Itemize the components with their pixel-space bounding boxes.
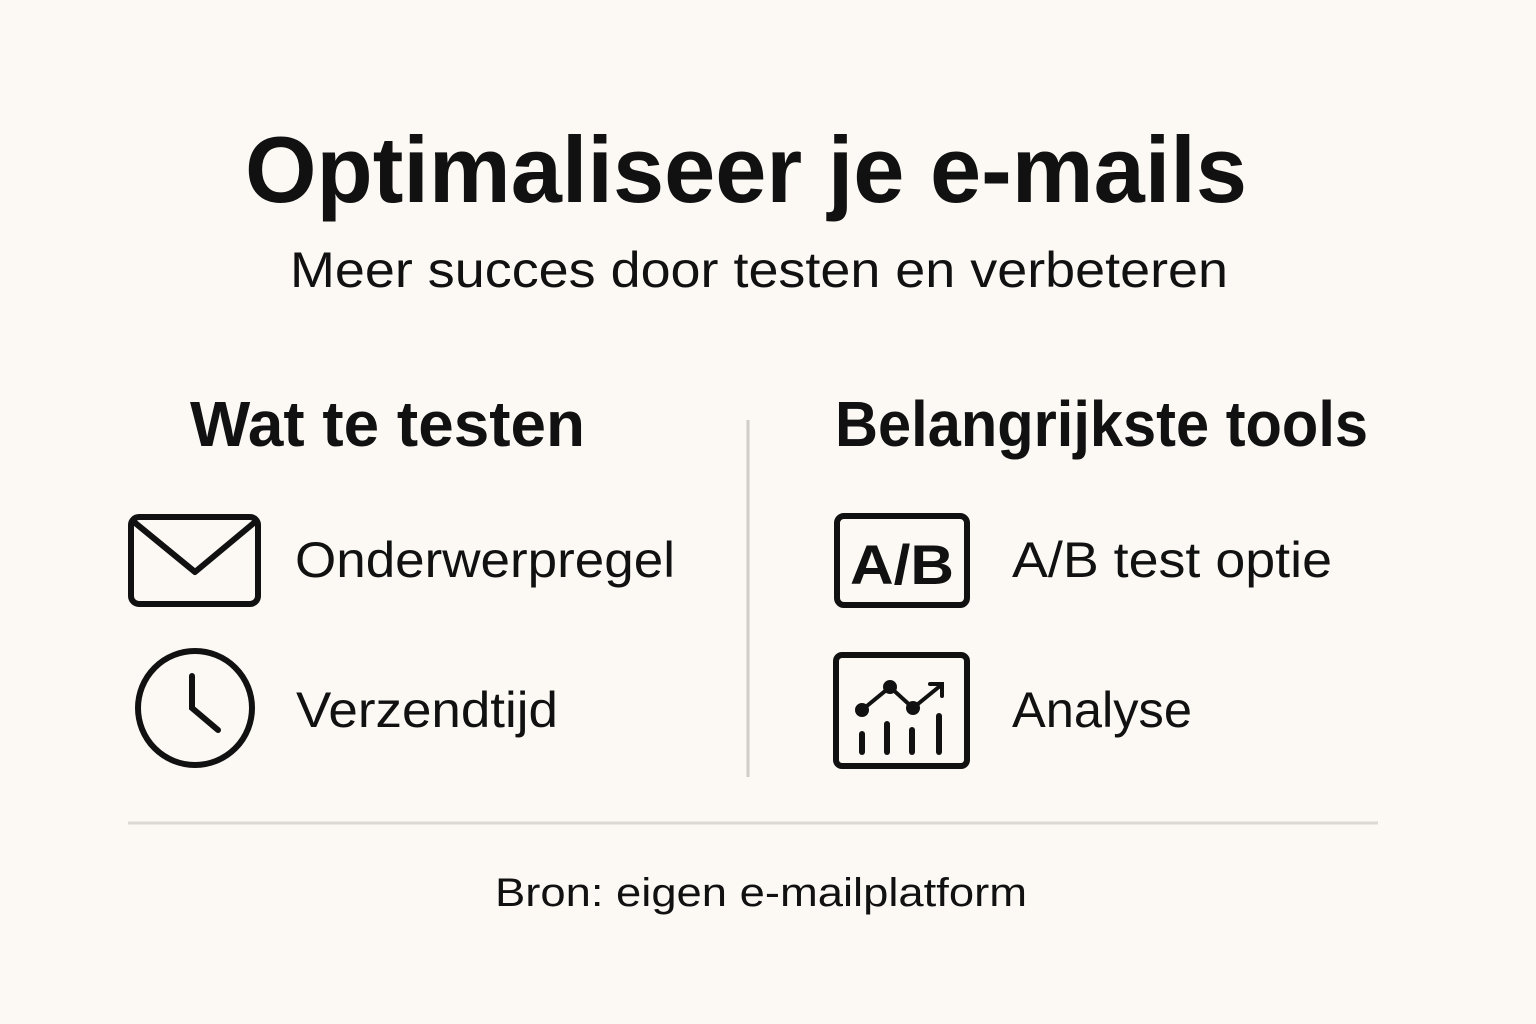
icon: clock <box>138 651 252 765</box>
source note: Bron: eigen e-mailplatform <box>495 871 1027 915</box>
heading: Belangrijkste tools: Belangrijkste tools <box>835 388 1368 460</box>
heading: Wat te testen: Wat te testen <box>190 388 585 460</box>
icon: A/B box <box>837 516 967 605</box>
title: Optimaliseer je e-mails <box>245 117 1247 222</box>
subtitle: Meer succes door testen en verbeteren <box>290 242 1228 298</box>
icon: envelope <box>131 517 258 604</box>
item: Onderwerpregel: Onderwerpregel <box>295 532 675 588</box>
item: A/B test optie: A/B test optie <box>1012 532 1332 588</box>
icon: A/B box: A/B <box>850 533 954 596</box>
item: Verzendtijd: Verzendtijd <box>296 682 558 738</box>
icon: analysis chart <box>836 655 967 766</box>
item: Analyse: Analyse <box>1012 682 1192 738</box>
